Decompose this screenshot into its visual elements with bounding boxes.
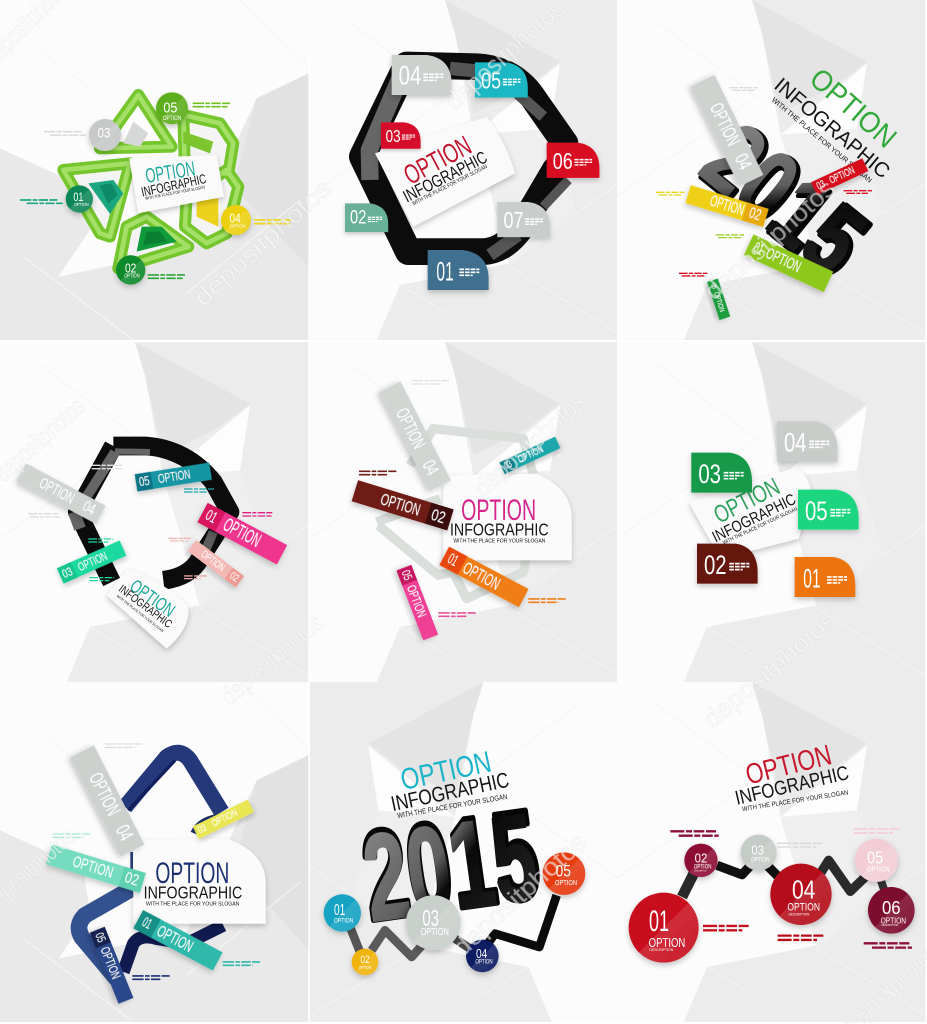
title: WITH THE PLACE FOR YOUR SLOGAN <box>770 95 874 185</box>
ribbon 05: OPTION <box>97 945 124 981</box>
circle 01: DESCRIPTION <box>649 947 673 952</box>
title card: OPTION <box>144 157 197 188</box>
tab 06: 06 <box>553 148 573 174</box>
ribbon 03 <box>500 437 560 474</box>
tab 03: 03 <box>386 126 401 146</box>
ribbon 04: 04 <box>111 822 137 845</box>
circle 04: 04 <box>792 875 815 905</box>
tab 04: 04 <box>399 61 421 91</box>
title card: OPTION <box>398 129 476 190</box>
circle 03: OPTION <box>420 927 449 938</box>
title card: OPTION <box>155 857 229 890</box>
gem: lime <box>183 132 213 153</box>
title: INFOGRAPHIC <box>733 762 851 810</box>
tab 02: 02 <box>350 208 366 229</box>
captions <box>359 381 568 616</box>
ribbon 01: 01 <box>751 240 766 259</box>
circle 05 <box>543 852 585 895</box>
panel background <box>0 682 308 1022</box>
captions <box>656 88 872 276</box>
tab 02 <box>345 203 388 232</box>
ribbon 04: 04 <box>730 151 755 174</box>
ribbon 04 <box>70 745 144 857</box>
ribbon 01: OPTION <box>219 515 264 552</box>
ribbon 05: OPTION <box>404 583 430 619</box>
ribbon 01 <box>439 547 529 607</box>
watermarks: depositphotos <box>699 174 841 306</box>
circle 05: 05 <box>556 861 571 880</box>
circle 01: 01 <box>649 905 669 938</box>
title card: OPTION <box>710 473 784 529</box>
panel: green star infographic <box>0 0 308 340</box>
circle 04 <box>770 864 832 925</box>
circle 01 <box>324 894 361 932</box>
green outline highlights <box>63 95 238 268</box>
tab 03 <box>691 453 752 493</box>
circle 04: 04 <box>229 210 241 225</box>
watermarks: depositphotos <box>698 606 842 734</box>
ribbon 04 <box>16 463 106 524</box>
circle 01 <box>66 185 93 213</box>
title card <box>133 839 266 924</box>
title card <box>689 467 811 559</box>
circle 04: 04 <box>476 946 488 961</box>
title: OPTION <box>742 739 835 791</box>
ribbon 03 <box>57 540 126 584</box>
tab 02 <box>697 544 758 584</box>
watermarks: depositphotos <box>215 609 329 711</box>
title card: INFOGRAPHIC <box>144 882 242 902</box>
ribbon 04: OPTION <box>36 475 77 508</box>
ribbon 01: 01 <box>202 507 220 527</box>
ribbon 05 <box>135 463 212 491</box>
year 2015: 2015 <box>354 782 547 947</box>
gem: yellow <box>197 198 218 227</box>
tab 06 <box>547 143 599 178</box>
year 2015 <box>354 782 547 948</box>
ribbon 02 <box>352 480 454 530</box>
panel: navy ribbons <box>0 682 308 1022</box>
circle 05 <box>156 92 188 124</box>
ribbon 02: 02 <box>429 505 448 527</box>
circle 02: 02 <box>125 261 136 275</box>
panel background <box>310 682 618 1022</box>
circle 03 <box>406 895 461 950</box>
circle 02: DESCRIPTION <box>694 870 707 872</box>
title card: OPTION <box>461 494 536 527</box>
ribbon 04 <box>379 381 451 491</box>
ribbon 04: OPTION <box>84 769 124 819</box>
ribbon 01 <box>133 910 223 971</box>
circle 05: 05 <box>867 848 883 868</box>
circle 03 <box>741 835 777 871</box>
captions <box>670 829 912 948</box>
ribbon 04: 04 <box>80 498 98 519</box>
tab 05: 05 <box>481 68 501 94</box>
gem: grey <box>123 122 148 147</box>
tab 05 <box>475 62 528 98</box>
year 2015 rotated: 2015 <box>682 102 885 296</box>
panel: five tabs <box>617 342 925 682</box>
circle 05: OPTION <box>555 878 577 887</box>
watermarks: depositphotos <box>447 828 593 962</box>
timeline line <box>682 860 884 897</box>
ribbon 02: 02 <box>747 205 763 224</box>
ribbon 01 <box>744 234 833 292</box>
circle 05: 05 <box>163 100 177 116</box>
green outline shapes <box>63 95 238 268</box>
pale outline shapes <box>377 429 533 599</box>
title card: WITH THE PLACE FOR YOUR SLOGAN <box>453 539 545 545</box>
ribbon 02 <box>46 844 146 893</box>
title: INFOGRAPHIC <box>389 768 511 816</box>
tab 02: 02 <box>704 550 727 580</box>
ribbon 05: 05 <box>92 931 109 945</box>
title card <box>443 474 572 560</box>
tab 07 <box>497 202 550 237</box>
ribbon 02: OPTION <box>199 548 227 574</box>
panel background <box>310 0 618 340</box>
circle 03: 03 <box>751 842 764 857</box>
tab 04 <box>777 421 838 461</box>
circle 03: 03 <box>422 905 439 931</box>
title: WITH THE PLACE FOR YOUR SLOGAN <box>742 789 849 813</box>
title card: OPTION <box>126 575 179 621</box>
ribbon 01: OPTION <box>154 921 196 956</box>
circle 02: OPTION <box>124 274 140 280</box>
ribbon 04: 04 <box>418 457 443 479</box>
year 2015: 2015 <box>355 788 545 948</box>
circle 02: OPTION <box>694 865 711 871</box>
panel background <box>0 342 308 682</box>
circle 01: OPTION <box>334 917 353 924</box>
circle 04: DESCRIPTION <box>789 912 810 916</box>
panel: 2015 timeline <box>310 682 618 1022</box>
circle 03: OPTION <box>751 858 769 864</box>
panel background <box>310 342 618 682</box>
circle 05: OPTION <box>867 864 890 873</box>
circle 02: OPTION <box>359 965 371 970</box>
watermarks: depositphotos <box>189 174 337 312</box>
title: OPTION <box>803 62 903 155</box>
title <box>733 739 851 813</box>
ribbon 01: OPTION <box>763 245 803 276</box>
ribbon 01: 01 <box>445 551 461 570</box>
circle 04: OPTION <box>787 902 820 914</box>
title card: INFOGRAPHIC <box>450 519 549 539</box>
title: OPTION <box>398 746 494 797</box>
gem: teal <box>88 180 123 214</box>
tab 03 <box>381 122 421 149</box>
ribbon 03: OPTION <box>516 444 545 466</box>
title card <box>129 155 224 213</box>
title card: WITH THE PLACE FOR YOUR SLOGAN <box>146 901 239 907</box>
captions <box>28 465 281 581</box>
panel background <box>617 0 925 340</box>
circle 01: 01 <box>334 902 345 919</box>
watermarks: depositphotos <box>469 388 591 502</box>
panel: hexagon with ribbons <box>0 342 308 682</box>
tab 05: 05 <box>805 496 828 526</box>
tab 01 <box>795 557 855 597</box>
panel: red circles timeline <box>617 682 925 1022</box>
panel background <box>0 0 308 340</box>
captions <box>53 744 262 979</box>
ribbon 01: OPTION <box>460 558 504 594</box>
title card: INFOGRAPHIC <box>400 147 490 206</box>
navy outline <box>79 753 223 979</box>
circle 06: 06 <box>882 897 901 918</box>
ribbon 03: 03 <box>503 459 514 472</box>
panel background <box>617 682 925 1022</box>
timeline line <box>351 895 557 957</box>
title card: WITH THE PLACE FOR YOUR SLOGAN <box>145 184 205 201</box>
tab 01: 01 <box>803 563 821 593</box>
tab 01: 01 <box>436 256 454 286</box>
circle 03: 03 <box>98 124 110 140</box>
ribbon 05 <box>707 279 730 320</box>
circle 05 <box>855 839 898 882</box>
ribbon 02: OPTION <box>378 490 423 520</box>
hexagon ring <box>74 446 230 582</box>
ribbon 03: 03 <box>815 178 827 193</box>
ribbon 05: 05 <box>709 282 719 290</box>
circle 02 <box>684 844 718 877</box>
hexagon ring <box>362 65 568 255</box>
ribbon 04: OPTION <box>705 100 743 149</box>
ribbon 03: OPTION <box>827 164 857 187</box>
circle 01: 01 <box>73 190 84 204</box>
circle 02: 02 <box>695 850 707 865</box>
ribbon 03 <box>811 158 868 195</box>
circle 04: OPTION <box>230 224 246 230</box>
title: WITH THE PLACE FOR YOUR SLOGAN <box>397 792 508 820</box>
ribbon 02: 02 <box>123 869 141 890</box>
ribbon 01 <box>197 503 287 564</box>
title card: WITH THE PLACE FOR YOUR SLOGAN <box>412 164 488 207</box>
ribbon 02 <box>188 540 244 587</box>
circle 03 <box>89 119 121 151</box>
circle 06 <box>868 887 915 934</box>
tab 01 <box>428 250 489 290</box>
title card <box>107 569 188 649</box>
tab 04 <box>392 55 452 95</box>
ribbon 04 <box>691 75 763 187</box>
ribbon 03: 03 <box>60 564 75 581</box>
ribbon 05: 05 <box>138 474 151 489</box>
year 2015 rotated: 2015 <box>685 105 888 299</box>
title card: INFOGRAPHIC <box>116 583 174 631</box>
circle 02 <box>116 255 145 285</box>
panel background <box>617 342 925 682</box>
title card: INFOGRAPHIC <box>140 171 208 200</box>
ribbon 03: 03 <box>196 823 209 836</box>
title card: WITH THE PLACE FOR YOUR SLOGAN <box>722 506 799 546</box>
ribbon 03: OPTION <box>76 549 109 574</box>
circle 04 <box>221 205 251 235</box>
ribbon 05 <box>90 927 133 1004</box>
circle 06: OPTION <box>881 915 906 925</box>
circle 06: DESCRIPTION <box>882 923 898 927</box>
title card <box>375 117 515 227</box>
circle 02 <box>352 949 378 975</box>
ribbon 05: OPTION <box>157 467 192 486</box>
title card: WITH THE PLACE FOR YOUR SLOGAN <box>116 594 164 633</box>
ribbon 05: 05 <box>398 568 415 583</box>
circle 04 <box>466 940 499 972</box>
ribbon 02: 02 <box>227 570 241 585</box>
panel: pale arrow with ribbons <box>310 342 618 682</box>
panel: hexagon ring with tabs <box>310 0 618 340</box>
ribbon 05: OPTION <box>712 291 727 313</box>
tab 03: 03 <box>698 459 721 489</box>
panel: 2015 diagonal ribbons <box>617 0 925 340</box>
captions <box>20 103 296 278</box>
ribbon 04: OPTION <box>392 405 430 452</box>
circle 01: OPTION <box>74 202 89 208</box>
ribbon 02 <box>685 185 769 227</box>
tab 04: 04 <box>784 428 807 458</box>
circle 01: OPTION <box>649 935 685 950</box>
tab 07: 07 <box>503 207 523 233</box>
ribbon 02: OPTION <box>70 853 115 882</box>
ribbon 03: OPTION <box>210 808 240 830</box>
title: INFOGRAPHIC <box>770 73 894 183</box>
circle 01 <box>629 893 699 963</box>
title card: INFOGRAPHIC <box>710 491 799 546</box>
ribbon 02: OPTION <box>708 193 746 219</box>
ribbon 01: 01 <box>139 915 154 933</box>
ribbon 05 <box>396 565 438 640</box>
circle 04: OPTION <box>475 960 493 966</box>
ribbon 03 <box>193 800 254 839</box>
circle 05: OPTION <box>163 116 181 122</box>
tab 05 <box>798 490 859 530</box>
title <box>389 746 511 820</box>
gem: green <box>137 227 177 252</box>
circle 02: 02 <box>360 954 370 966</box>
